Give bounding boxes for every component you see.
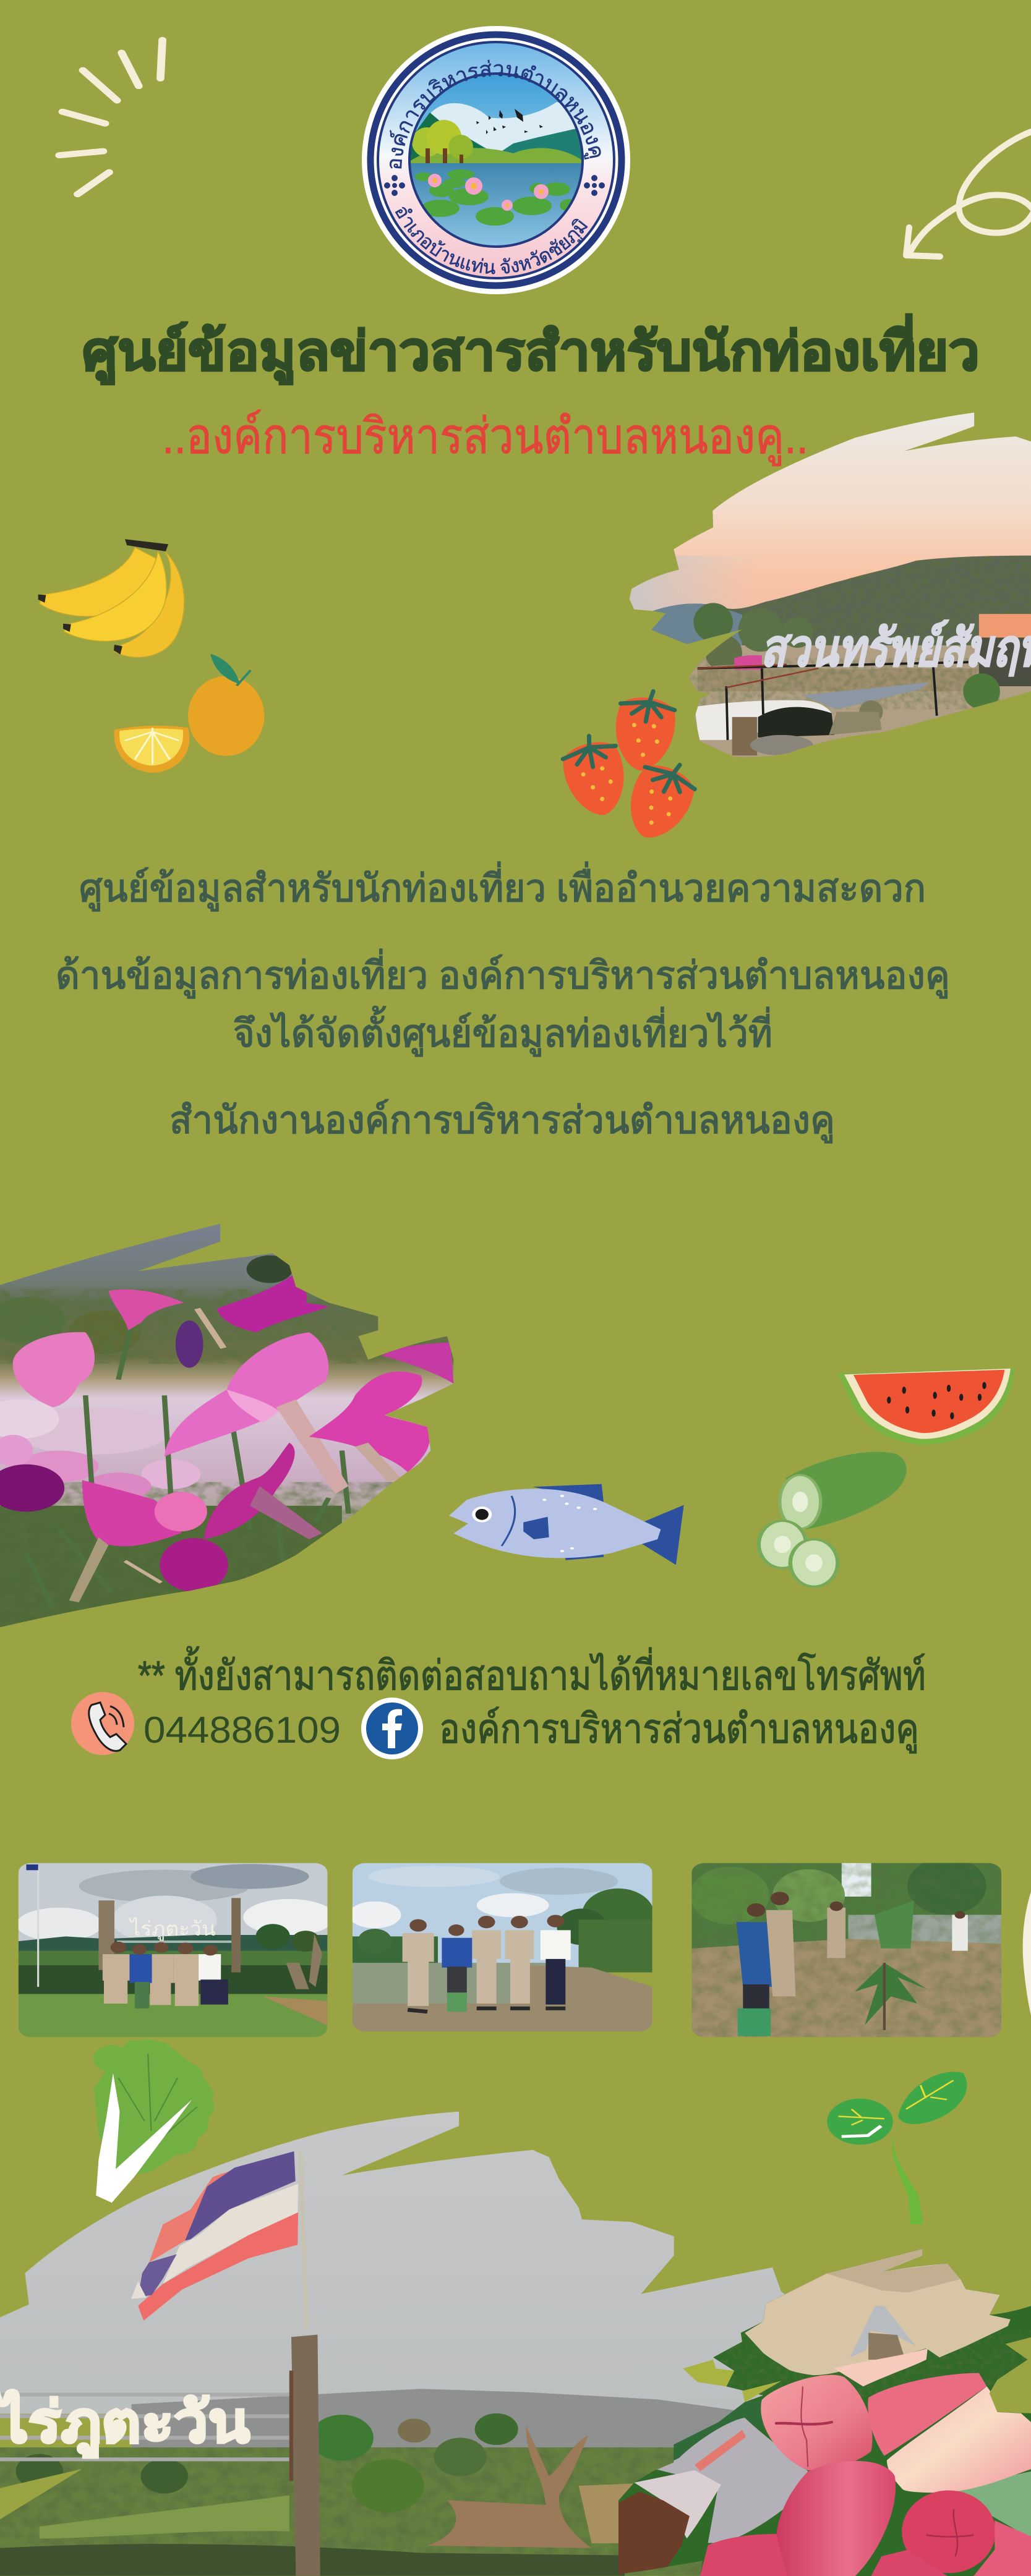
description line 4: สำนักงานองค์การบริหารส่วนตำบลหนองคู bbox=[169, 1099, 835, 1143]
icon: lettuce bbox=[93, 2039, 215, 2203]
photo brush: mushroom and rose apples bbox=[618, 2225, 1031, 2576]
logo stars bbox=[384, 175, 605, 196]
icon: phone bbox=[71, 1692, 134, 1755]
logo scene bbox=[408, 73, 584, 250]
text block: description bbox=[56, 862, 950, 1143]
organisation name: องค์การบริหารส่วนตำบลหนองคู bbox=[439, 1706, 919, 1754]
icon: fish bbox=[449, 1484, 684, 1565]
icon: sparkle burst bbox=[59, 40, 163, 194]
decorative: white curve at right edge bbox=[1023, 1892, 1031, 2015]
phone number: 044886109 bbox=[143, 1709, 341, 1751]
icon: strawberries bbox=[557, 687, 703, 849]
photo: officials standing by pond bbox=[348, 1863, 654, 2031]
photo: officials seated at sign bbox=[17, 1863, 335, 2037]
icon: bananas bbox=[38, 539, 184, 657]
logo: round emblem bbox=[362, 26, 630, 294]
description line 3: จึงได้จัดตั้งศูนย์ข้อมูลท่องเที่ยวไว้ที่ bbox=[233, 1006, 772, 1056]
icon: facebook bbox=[361, 1698, 423, 1759]
strawberry top bbox=[610, 687, 678, 774]
description line 1: ศูนย์ข้อมูลสำหรับนักท่องเที่ยว เพื่ออำนวยความสะดวก bbox=[79, 862, 926, 911]
strawberry right bbox=[617, 752, 703, 849]
photo brush: flag and farm sign bbox=[0, 2112, 785, 2576]
bag with roots bbox=[656, 2418, 808, 2543]
photo brush: garden sign and mountain bbox=[618, 402, 1031, 760]
flag and pole bbox=[131, 2151, 309, 2331]
subtitle: ..องค์การบริหารส่วนตำบลหนองคู.. bbox=[162, 409, 808, 466]
title: ศูนย์ข้อมูลข่าวสารสำหรับนักท่องเที่ยว bbox=[82, 313, 980, 385]
strawberry left bbox=[557, 730, 633, 822]
sign text: ไร่ภูตะวัน bbox=[129, 1918, 216, 1941]
photo: inspecting the tree planting bbox=[690, 1857, 1001, 2037]
icon: watermelon bbox=[837, 1368, 1014, 1445]
description line 2: ด้านข้อมูลการท่องเที่ยว องค์การบริหารส่วนตำบลหนองคู bbox=[56, 949, 950, 998]
icon: looping arrow bbox=[906, 131, 1031, 257]
logo ring text top: องค์การบริหารส่วนตำบลหนองคู bbox=[390, 59, 601, 169]
big petunia bbox=[165, 1332, 328, 1456]
sign text: ไร่ภูตะวัน: ไร่ภูตะวัน bbox=[0, 2390, 250, 2458]
mushroom bbox=[745, 2249, 1011, 2375]
icon: orange with leaf bbox=[114, 654, 264, 773]
rose apples bbox=[834, 2349, 928, 2386]
accent: pale green brush wedges bbox=[683, 2360, 782, 2402]
icon: seedling sprout bbox=[827, 2072, 967, 2224]
photo brush: petunia flowers bbox=[0, 1222, 460, 1632]
leaves behind fruit bbox=[674, 2400, 766, 2462]
logo ring text bottom: อำเภอบ้านแท่น จังหวัดชัยภูมิ bbox=[395, 206, 588, 274]
icon: cucumber bbox=[759, 1452, 907, 1587]
